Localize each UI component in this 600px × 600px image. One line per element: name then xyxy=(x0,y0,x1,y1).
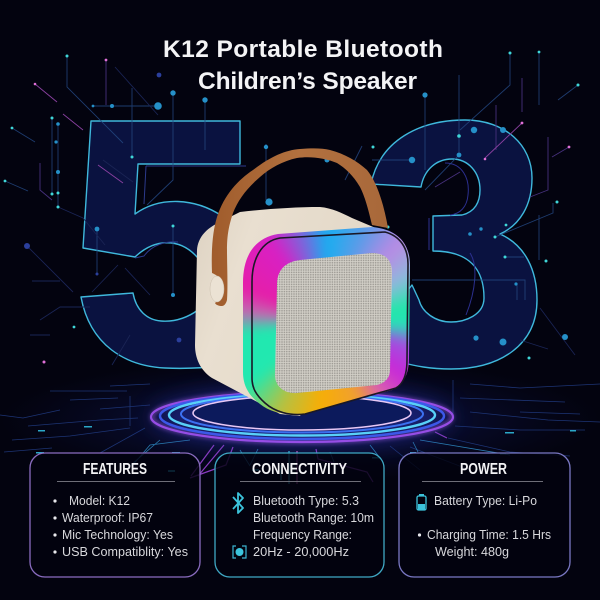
heading: power: POWER xyxy=(460,461,507,478)
panel: connectivity xyxy=(215,453,384,577)
speaker body xyxy=(195,207,378,416)
connectivity list: Bluetooth Type: 5.3 xyxy=(253,493,359,508)
floor glow xyxy=(0,358,600,482)
connectivity list: Bluetooth Range: 10m xyxy=(253,510,374,525)
icon: bluetooth xyxy=(233,493,243,513)
circuit nodes xyxy=(4,51,580,363)
panel: power xyxy=(399,453,570,577)
feature list: USB Compatiblity: Yes xyxy=(62,544,188,559)
power list: Weight: 480g xyxy=(435,544,509,559)
title xyxy=(163,36,443,95)
power list: Battery Type: Li-Po xyxy=(434,493,537,508)
feature list: Model: K12 xyxy=(69,493,130,508)
large numeral 3 xyxy=(371,120,537,369)
connectivity list: 20Hz - 20,000Hz xyxy=(253,544,349,559)
strap button xyxy=(210,276,224,302)
power list: Charging Time: 1.5 Hrs xyxy=(427,527,551,542)
rainbow LED ring xyxy=(243,227,410,414)
feature list: Mic Technology: Yes xyxy=(62,527,173,542)
ring dark edge xyxy=(252,232,408,415)
connectivity list xyxy=(253,493,374,559)
connectivity list: Frequency Range: xyxy=(253,527,352,542)
carrying strap xyxy=(212,148,388,306)
circuit lines: lower board network xyxy=(0,380,600,484)
heading: connectivity: CONNECTIVITY xyxy=(252,461,347,478)
speaker grille xyxy=(275,253,392,393)
title: K12 Portable Bluetooth xyxy=(163,36,443,63)
icon: frequency xyxy=(233,546,246,558)
icon: battery xyxy=(417,494,426,510)
large numeral 5 xyxy=(81,121,246,368)
panel: features xyxy=(30,453,200,577)
speaker xyxy=(195,148,410,416)
feature list xyxy=(53,493,188,559)
circuit lines: dim upper network xyxy=(5,52,578,365)
glowing platform rings xyxy=(151,389,453,445)
heading: features: FEATURES xyxy=(83,461,147,478)
teal circuit pads xyxy=(36,426,576,472)
title: Children’s Speaker xyxy=(198,68,417,95)
feature list: Waterproof: IP67 xyxy=(62,510,153,525)
power list xyxy=(418,493,551,559)
